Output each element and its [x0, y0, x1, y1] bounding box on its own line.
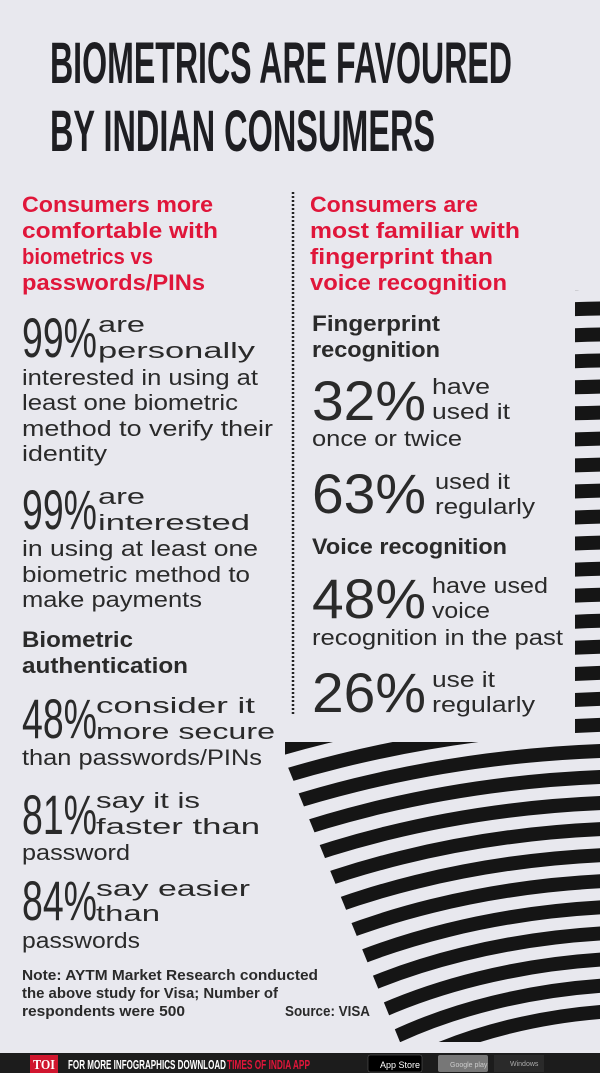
stat: 32%: once or twice [312, 426, 462, 451]
stat: 26%: 26% [312, 661, 426, 724]
subheading: biometric authentication: Biometric [22, 627, 133, 652]
footer bar: TIMES OF INDIA APP [227, 1057, 310, 1072]
footer bar: FOR MORE INFOGRAPHICS DOWNLOAD [68, 1057, 226, 1072]
subheading: fingerprint recognition: Fingerprint [312, 311, 441, 336]
footer bar [0, 1053, 600, 1073]
stat: 48% voice: have used [432, 573, 548, 598]
stat: 48% voice [312, 567, 563, 650]
stat: 81% faster: faster than [96, 814, 260, 839]
heading: right red: Consumers are [310, 192, 478, 217]
stat: 32%: 32% [312, 369, 426, 432]
stat: 99% payments [22, 478, 258, 612]
heading: left red: Consumers more [22, 192, 213, 217]
stat: 81% faster: say it is [96, 788, 200, 813]
stat: 32%: have [432, 374, 490, 399]
footer bar: Google play [450, 1062, 488, 1069]
stat: 48% secure [22, 687, 275, 770]
note and source [22, 967, 370, 1020]
heading: left red [22, 192, 218, 295]
stat: 99% payments: 99% [22, 478, 97, 541]
stat: 63%: used it [435, 469, 510, 494]
stat: 48% secure: more secure [96, 719, 275, 744]
subheading: voice recognition: Voice recognition [312, 534, 507, 559]
heading: left red: comfortable with [22, 218, 218, 243]
stat: 48% secure: consider it [96, 693, 255, 718]
stat: 63%: 63% [312, 462, 426, 525]
heading: right red: voice recognition [310, 270, 507, 295]
stat: 99% payments: interested [98, 510, 250, 535]
subheading: fingerprint recognition: recognition [312, 337, 440, 362]
stat: 99% payments: are [98, 484, 145, 509]
stat: 99% identity: method to verify their [22, 416, 273, 441]
stat: 48% voice: recognition in the past [312, 625, 563, 650]
stat: 48% voice: voice [432, 598, 490, 623]
stat: 99% identity: are [98, 312, 145, 337]
panel: right column [310, 192, 563, 724]
stat: 26%: use it [432, 667, 495, 692]
footer bar: TOI [33, 1058, 55, 1073]
stat: 26% [312, 661, 535, 724]
title [50, 31, 512, 164]
panel: left column [22, 192, 275, 953]
stat: 84% easier: say easier [96, 876, 250, 901]
heading: right red: fingerprint than [310, 244, 493, 269]
subheading: biometric authentication [22, 627, 188, 678]
heading: left red: biometrics vs [22, 244, 153, 269]
subheading: fingerprint recognition [312, 311, 441, 362]
note and source: respondents were 500 [22, 1003, 185, 1020]
stat: 99% identity: personally [98, 338, 255, 363]
stat: 63%: regularly [435, 494, 535, 519]
divider dotted [292, 192, 294, 716]
stat: 99% identity: identity [22, 441, 107, 466]
footer bar: App Store [380, 1060, 420, 1070]
heading: right red: most familiar with [310, 218, 520, 243]
stat: 81% faster: 81% [22, 783, 97, 846]
stat: 99% payments: in using at least one [22, 536, 258, 561]
stat: 48% secure: than passwords/PINs [22, 745, 262, 770]
note and source: the above study for Visa; Number of [22, 985, 279, 1002]
stat: 48% secure: 48% [22, 687, 97, 750]
stat: 63% [312, 462, 535, 525]
stat: 84% easier: than [96, 901, 160, 926]
note and source: Source: VISA [285, 1003, 370, 1020]
heading: left red: passwords/PINs [22, 270, 205, 295]
stat: 99% identity: 99% [22, 306, 97, 369]
footer bar: Windows [510, 1061, 539, 1068]
stat: 81% faster [22, 783, 260, 865]
stat: 32% [312, 369, 510, 451]
stat: 84% easier: 84% [22, 869, 97, 932]
stat: 84% easier: passwords [22, 928, 140, 953]
stat: 84% easier [22, 869, 250, 953]
stat: 99% payments: biometric method to [22, 562, 250, 587]
stat: 99% identity: least one biometric [22, 390, 238, 415]
note and source: Note: AYTM Market Research conducted [22, 967, 318, 984]
fingerprint graphic [285, 290, 600, 1042]
stat: 99% identity [22, 306, 273, 466]
stat: 99% payments: make payments [22, 587, 202, 612]
stat: 48% voice: 48% [312, 567, 426, 630]
heading: right red [310, 192, 520, 295]
stat: 32%: used it [432, 399, 510, 424]
stat: 81% faster: password [22, 840, 130, 865]
stat: 26%: regularly [432, 692, 535, 717]
stat: 99% identity: interested in using at [22, 365, 258, 390]
subheading: biometric authentication: authentication [22, 653, 188, 678]
